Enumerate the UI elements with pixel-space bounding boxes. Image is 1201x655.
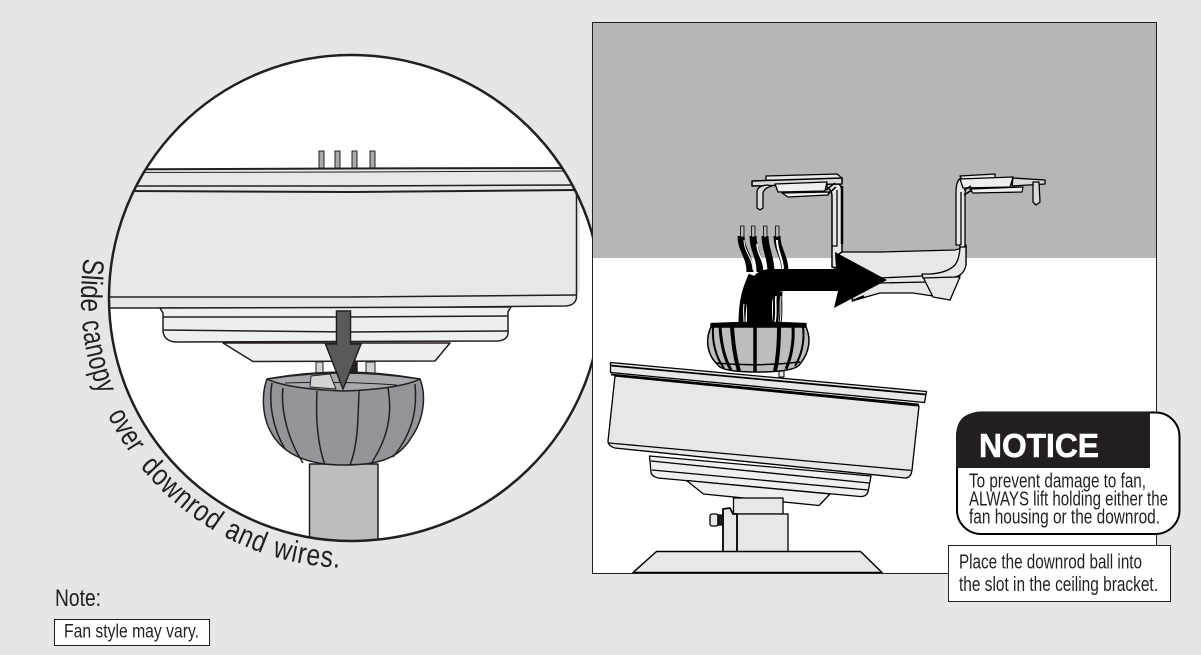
curved caption: and: [226, 524, 269, 552]
left plate: [766, 174, 842, 181]
curved caption: wires.: [276, 540, 338, 568]
downrod ball: [708, 322, 809, 377]
downrod: [310, 464, 378, 544]
note box: Fan style may vary.: [64, 622, 199, 642]
note box: [54, 620, 210, 646]
ceiling bracket: [752, 174, 1045, 301]
wires: [741, 236, 785, 323]
arrow: into bracket: [747, 252, 887, 323]
curved caption: downrod: [142, 458, 226, 530]
canopy collar: [223, 343, 450, 362]
panel: zoomed canopy detail circle: [100, 55, 601, 544]
curved caption: [80, 260, 338, 568]
right arm: [956, 177, 968, 247]
curved caption: Slide: [80, 260, 104, 311]
posts above ball: [316, 362, 376, 373]
tilted fan housing: [608, 362, 926, 506]
downrod ball: [263, 372, 423, 465]
notice header: [956, 412, 1150, 468]
bracket cradle: [834, 247, 966, 301]
panel: ceiling bracket illustration: [592, 22, 1156, 574]
caption box: Place the downrod ball into: [959, 552, 1142, 574]
outline of circle: [109, 55, 601, 541]
left arm: [826, 181, 842, 268]
curved caption: canopy: [82, 321, 114, 390]
curved caption: over: [110, 410, 144, 450]
notice body: [969, 470, 1168, 528]
fan base: [633, 498, 882, 572]
callout: notice: [956, 412, 1180, 534]
canopy step: [160, 307, 511, 342]
fan housing: [100, 168, 580, 308]
arrow: down: [326, 311, 361, 389]
notice title: NOTICE: [979, 427, 1099, 464]
notice body: To prevent damage to fan,: [969, 470, 1146, 492]
caption box: [948, 546, 1170, 602]
wire tips: [319, 151, 375, 168]
note heading: Note:: [55, 585, 101, 612]
right plate: [960, 174, 995, 180]
